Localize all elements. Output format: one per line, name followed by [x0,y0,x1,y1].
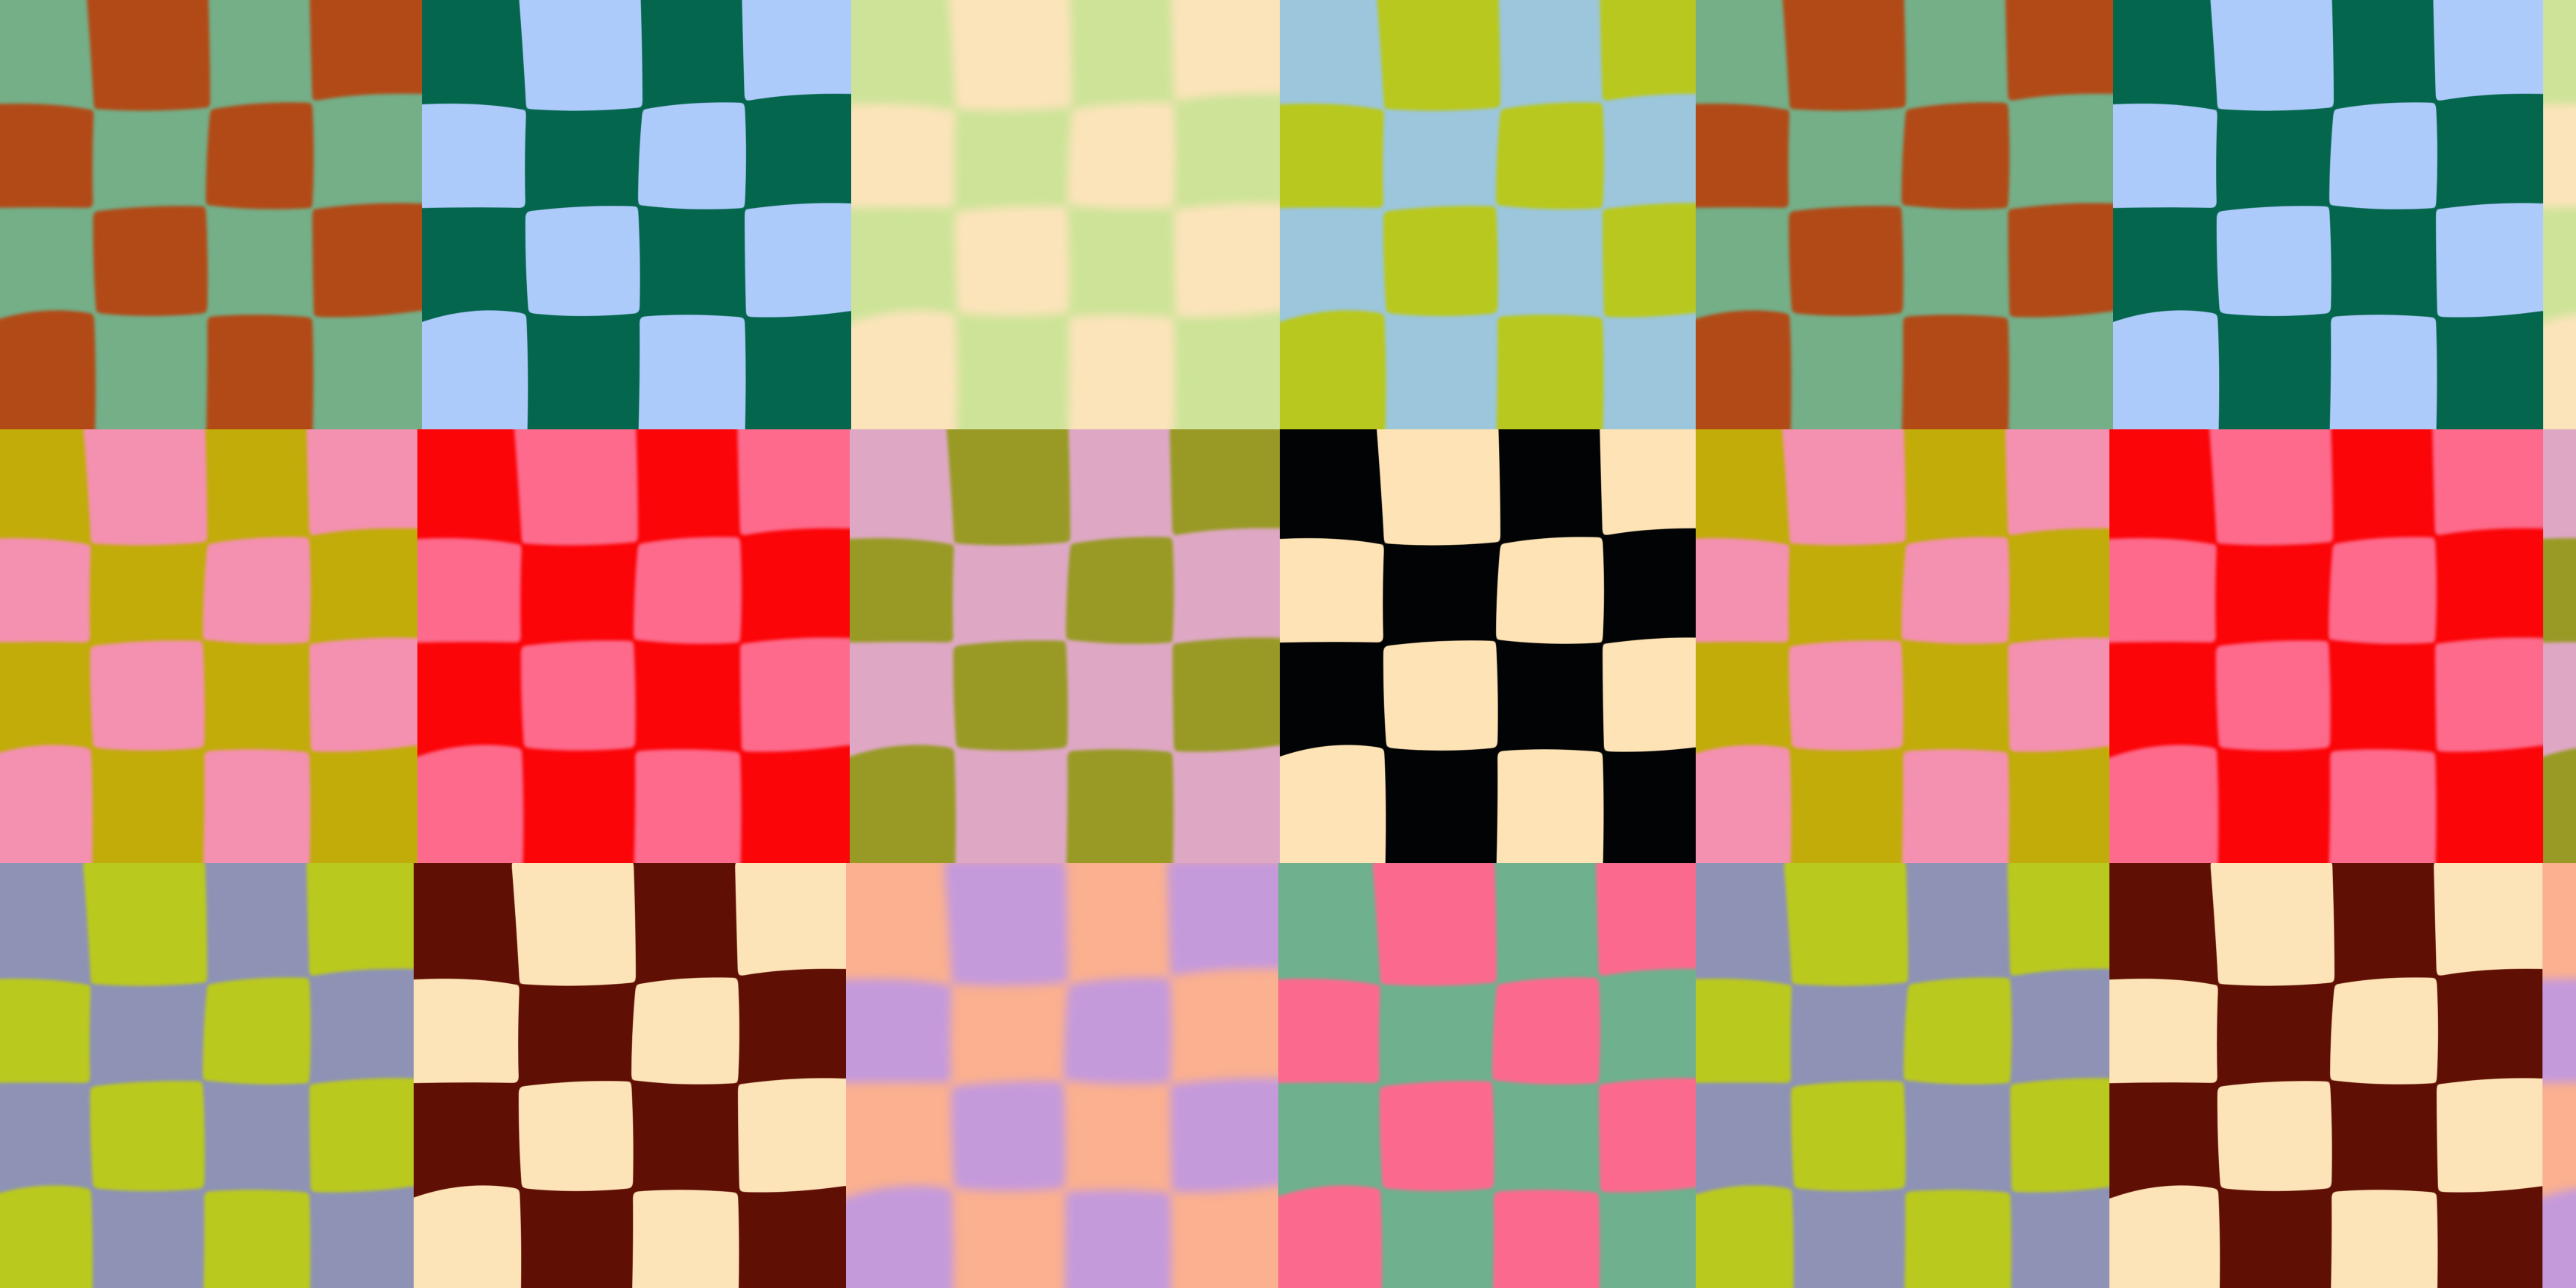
row 1 tile: sage and rust [0,0,422,429]
row 3 tile: peach and lilac [846,863,1278,1288]
row 2 tile: red and coral pink repeat [2109,429,2543,863]
row 3 tile: periwinkle and lime [0,863,414,1288]
row 1 tile: forest green and sky blue repeat [2113,0,2543,429]
row 2 tile: mauve and olive [850,429,1280,863]
row 1 tile: pale green and cream [851,0,1280,429]
row 2 tile: red and coral pink [417,429,850,863]
row 1 tile: sage and rust repeat [1696,0,2113,429]
row 2 tile: black and cream [1280,429,1696,863]
row 3 tile: periwinkle and lime repeat [1696,863,2109,1288]
row 3 tile: green and pink [1278,863,1696,1288]
row 3 tile: maroon and cream [414,863,846,1288]
row 1 tile: pale green and cream partial [2543,0,2576,326]
row 1 tile: light blue and lime [1280,0,1696,429]
row 1 tile: forest green and sky blue [422,0,851,429]
row 2 tile: mustard and pink [0,429,417,863]
row 3 tile: maroon and cream repeat [2109,863,2542,1288]
row 2 tile: mustard and pink repeat [1696,429,2109,863]
row 2 tile: mauve and olive partial [2543,429,2576,863]
row 3 tile: peach and lilac partial [2542,863,2576,1288]
